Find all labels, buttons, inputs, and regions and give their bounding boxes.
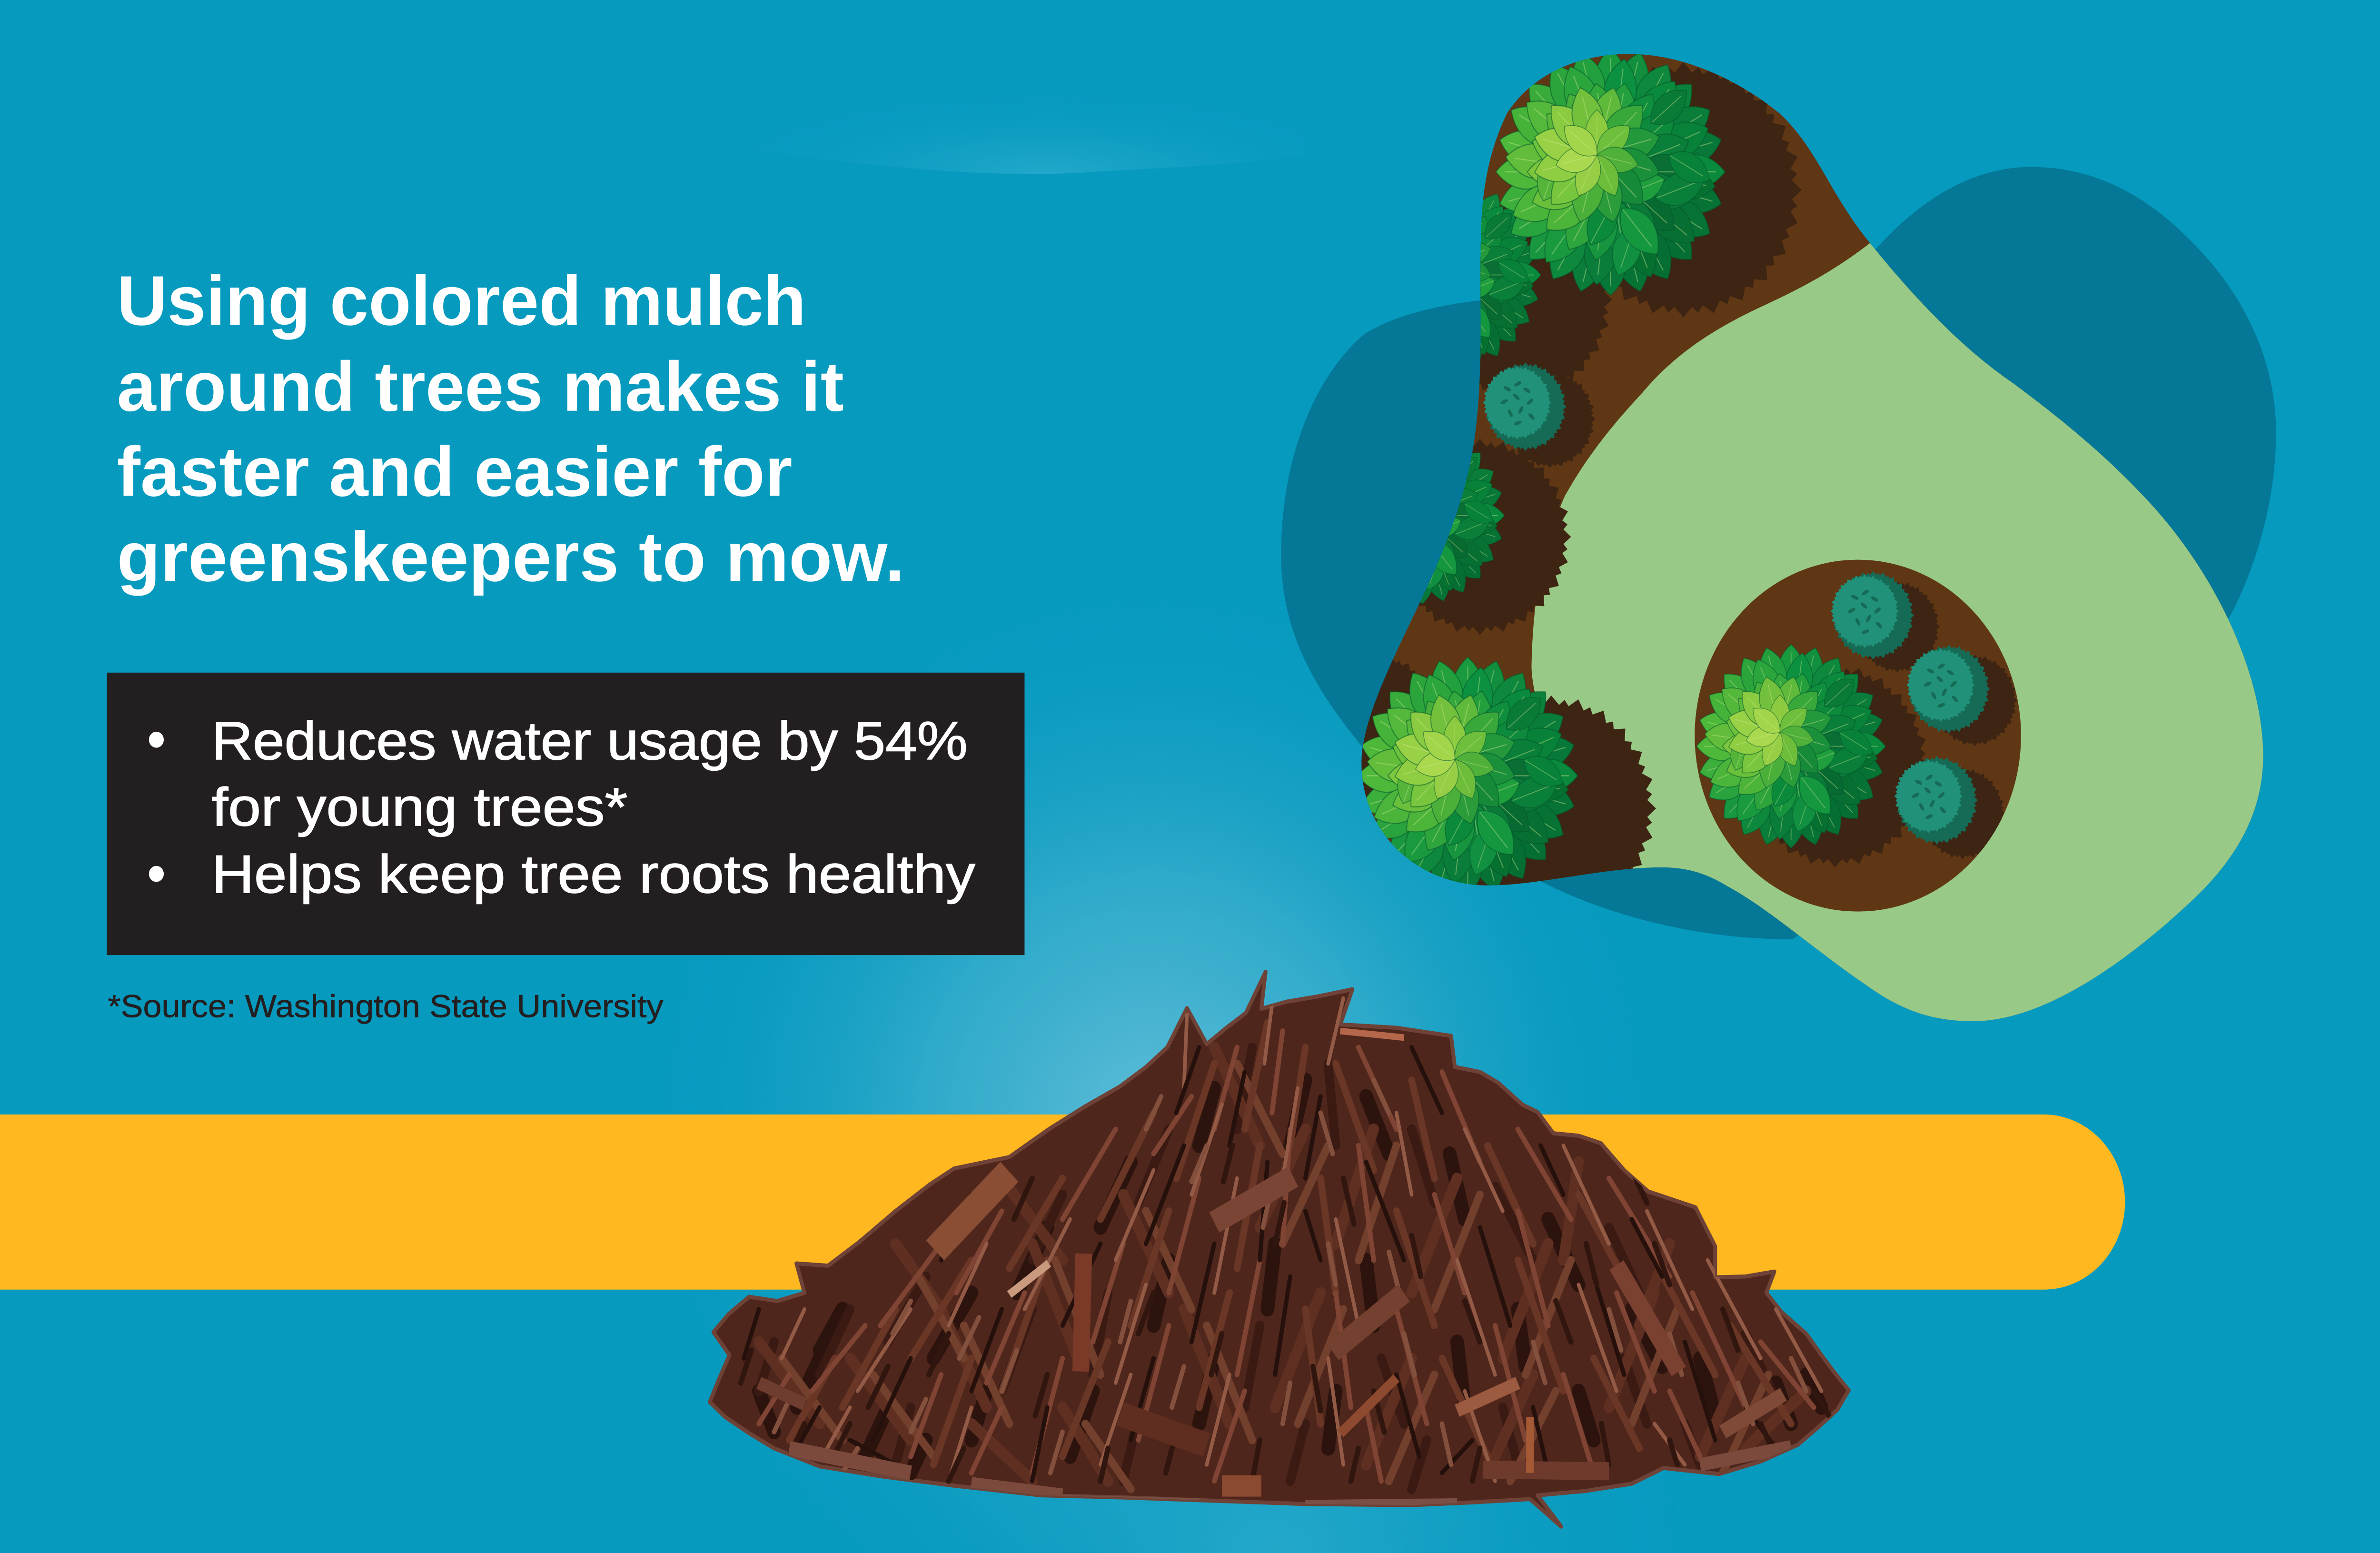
dark teal backdrop blob <box>1281 167 2276 939</box>
bullet 1 text <box>212 711 968 837</box>
mulch pile <box>710 972 1849 1526</box>
yellow band <box>0 1115 2125 1290</box>
round mulch bed with plants <box>1695 560 2021 912</box>
headline <box>117 262 905 596</box>
lawn <box>1532 243 2263 1021</box>
bullet 1 text: Reduces water usage by 54% <box>212 711 968 771</box>
headline: around trees makes it <box>117 348 844 426</box>
bullet 1 <box>149 732 164 748</box>
round bush: left strip <box>1480 358 1570 455</box>
headline: faster and easier for <box>117 433 793 511</box>
round bush 1 <box>1827 567 1918 664</box>
garden scene illustration <box>1361 54 2263 1021</box>
shrub: bottom left <box>1358 657 1578 895</box>
source note: *Source: Washington State University <box>108 988 664 1024</box>
benefits panel <box>107 673 1024 955</box>
bullet 1 text: for young trees* <box>212 777 628 837</box>
shrub: left strip lower <box>1420 452 1505 605</box>
headline: greenskeepers to mow. <box>117 518 905 596</box>
shrub: round bed <box>1696 644 1886 848</box>
mulch bed <box>1361 54 2263 1021</box>
round bush 3 <box>1891 752 1982 848</box>
shrub shadows on bed <box>1361 62 1802 886</box>
bed shadows <box>1733 577 2021 876</box>
shrub: left strip upper <box>1367 181 1541 368</box>
shrub: top <box>1496 48 1725 296</box>
bullet 2 text: Helps keep tree roots healthy <box>212 845 975 905</box>
headline: Using colored mulch <box>117 262 806 340</box>
round bush 2 <box>1904 641 1993 737</box>
bullet 2 <box>149 866 164 882</box>
